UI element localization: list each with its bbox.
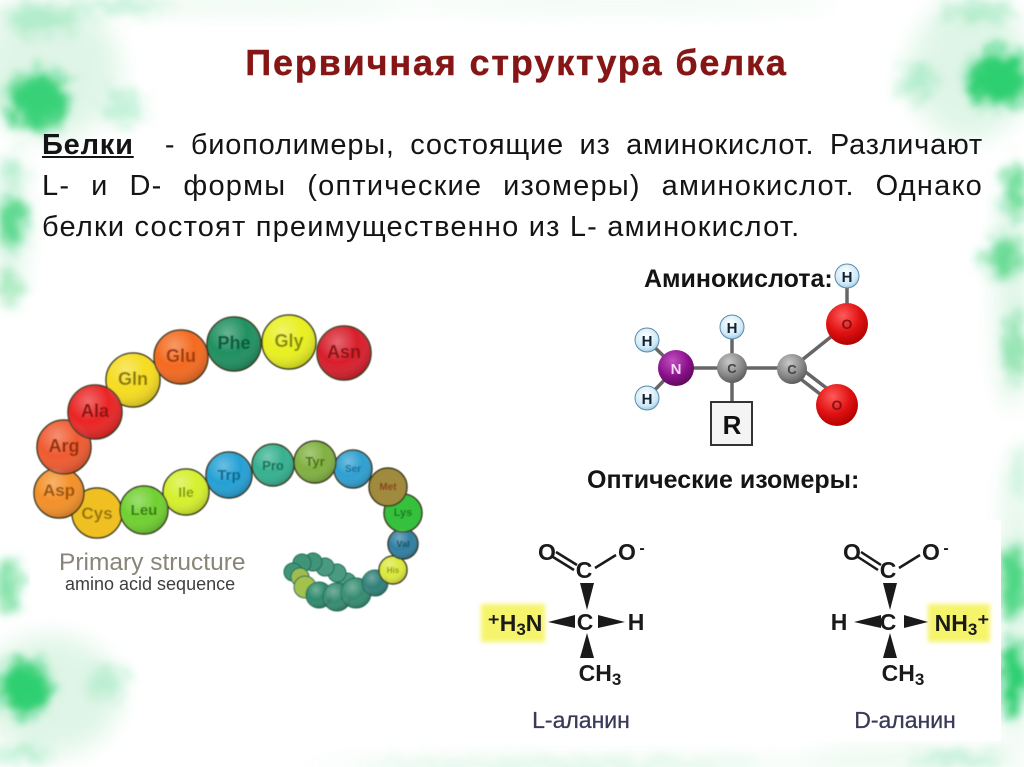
diagram: L-alanine: L-аланин [532,707,630,733]
diagram: D-alanine: NH [935,610,968,636]
heading: optical isomers: Оптические изомеры: [587,466,859,494]
bead labels: Pro [262,458,284,473]
diagram: D-alanine: CH [882,660,915,686]
chain caption: Primary structure [59,549,246,576]
diagram: amino acid molecule: O [832,397,843,413]
title: Первичная структура белка [245,42,788,83]
text block: intro: Белки - биополимеры, состоящие из аминокислот. Различают [42,129,983,161]
beads [34,315,422,584]
bead labels: Arg [48,436,80,456]
bead labels: Ile [178,484,194,500]
diagram: D-alanine: 3 [915,670,924,689]
diagram: D-alanine: O [922,539,940,565]
diagram: amino acid molecule: C [727,361,737,376]
diagram: L-alanine: C [576,557,592,583]
diagram: D-alanine: 3 [968,620,977,639]
bead labels: Tyr [305,454,325,469]
bead labels: Val [396,539,410,549]
bead labels: Ala [81,401,110,421]
bead labels: Gln [118,369,148,389]
diagram: L-alanine: CH [579,660,612,686]
diagram: D-alanine: ⁺ [977,610,989,636]
chain caption: amino acid sequence [65,574,235,594]
diagram: amino acid molecule: H [842,269,852,286]
diagram: D-alanine: O [843,539,861,565]
heading: amino acid: Аминокислота: [644,265,833,293]
text block: intro [42,129,983,243]
bead labels: Asp [43,481,75,500]
bead labels: Asn [327,342,361,362]
chain caption [59,549,246,594]
diagram: amino acid molecule: H [642,333,652,350]
diagram: L-alanine: N [526,610,542,636]
diagram: amino acid molecule: O [842,316,853,332]
diagram: amino acid molecule: N [671,361,681,378]
bead labels: Glu [166,346,196,366]
diagram: D-alanine: C [880,557,896,583]
bead labels: Trp [217,467,241,484]
diagram: amino acid molecule: C [787,362,797,377]
diagram: L-alanine: 3 [612,670,621,689]
text block: intro: белки состоят преимущественно из L- аминокислот. [42,211,800,243]
bead labels: Gly [274,331,304,351]
diagram: L-alanine: O [538,539,556,565]
diagram: L-alanine: 3 [516,620,526,639]
diagram: L-alanine: O [618,539,636,565]
diagram: amino acid molecule: H [727,320,737,337]
bead labels: Met [379,482,397,493]
diagram: D-alanine: C [880,609,896,635]
diagram: L-alanine: C [577,609,593,635]
tail beads [284,553,388,611]
bead labels: Phe [217,333,251,353]
bead labels: Leu [131,502,157,519]
diagram: D-alanine: - [943,540,949,557]
diagram: L-alanine: ⁺H [488,610,516,636]
bead labels: Lys [394,507,412,519]
bead shading [34,315,418,611]
diagram: amino acid molecule: R [723,410,742,440]
bead labels [43,331,412,575]
diagram: L-alanine: H [628,609,644,635]
diagram: D-alanine: D-аланин [854,707,956,733]
bead labels: Cys [81,504,113,523]
bead labels: His [387,566,400,575]
diagram: amino acid molecule: H [642,391,652,408]
bead labels: Ser [345,464,361,475]
diagram: L-alanine: - [639,540,645,557]
text block: intro: L- и D- формы (оптические изомеры) аминокислот. Однако [42,170,983,202]
diagram: D-alanine [831,539,990,733]
diagram: D-alanine: H [831,609,847,635]
